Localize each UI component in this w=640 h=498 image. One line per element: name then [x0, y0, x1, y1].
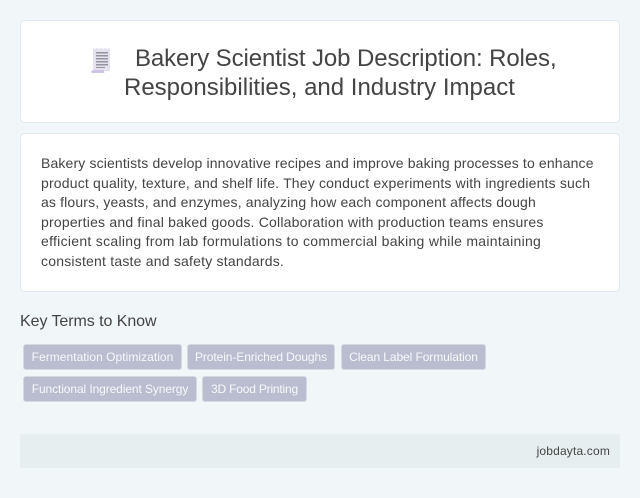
tag: functional: Functional Ingredient Synergy — [32, 382, 188, 396]
description text: properties and final baked goods. Collaboration with production teams ensures — [41, 214, 544, 230]
description text — [41, 155, 594, 269]
tag: fermentation — [23, 344, 182, 370]
tag: 3D printing: 3D Food Printing — [211, 382, 298, 396]
description text: Bakery scientists develop innovative recipes and improve baking processes to enhance — [41, 155, 594, 171]
panel: description — [20, 133, 620, 292]
description text: efficient scaling from lab formulations to commercial baking while maintaining — [41, 233, 541, 249]
tag: protein — [187, 344, 335, 370]
footer bar — [20, 434, 620, 468]
tag: functional — [23, 376, 197, 402]
tag: fermentation: Fermentation Optimization — [32, 350, 173, 364]
description text: as flours, yeasts, and enzymes, analyzing how each component affects dough — [41, 194, 536, 210]
title — [124, 45, 557, 101]
icon: receipt document — [91, 48, 110, 73]
tag: clean label — [341, 344, 486, 370]
title: Bakery Scientist Job Description: Roles, — [135, 45, 557, 72]
tag: 3D printing — [202, 376, 307, 402]
title: Responsibilities, and Industry Impact — [124, 74, 515, 101]
description text: product quality, texture, and shelf life. They conduct experiments with ingredients such — [41, 175, 590, 191]
tag list — [23, 344, 486, 402]
tag: protein: Protein-Enriched Doughs — [195, 350, 327, 364]
tag: clean label: Clean Label Formulation — [349, 350, 478, 364]
footer credit: jobdayta.com — [537, 444, 610, 458]
description text: consistent taste and safety standards. — [41, 253, 284, 269]
heading: key terms: Key Terms to Know — [20, 313, 157, 330]
panel: title card — [20, 20, 620, 123]
